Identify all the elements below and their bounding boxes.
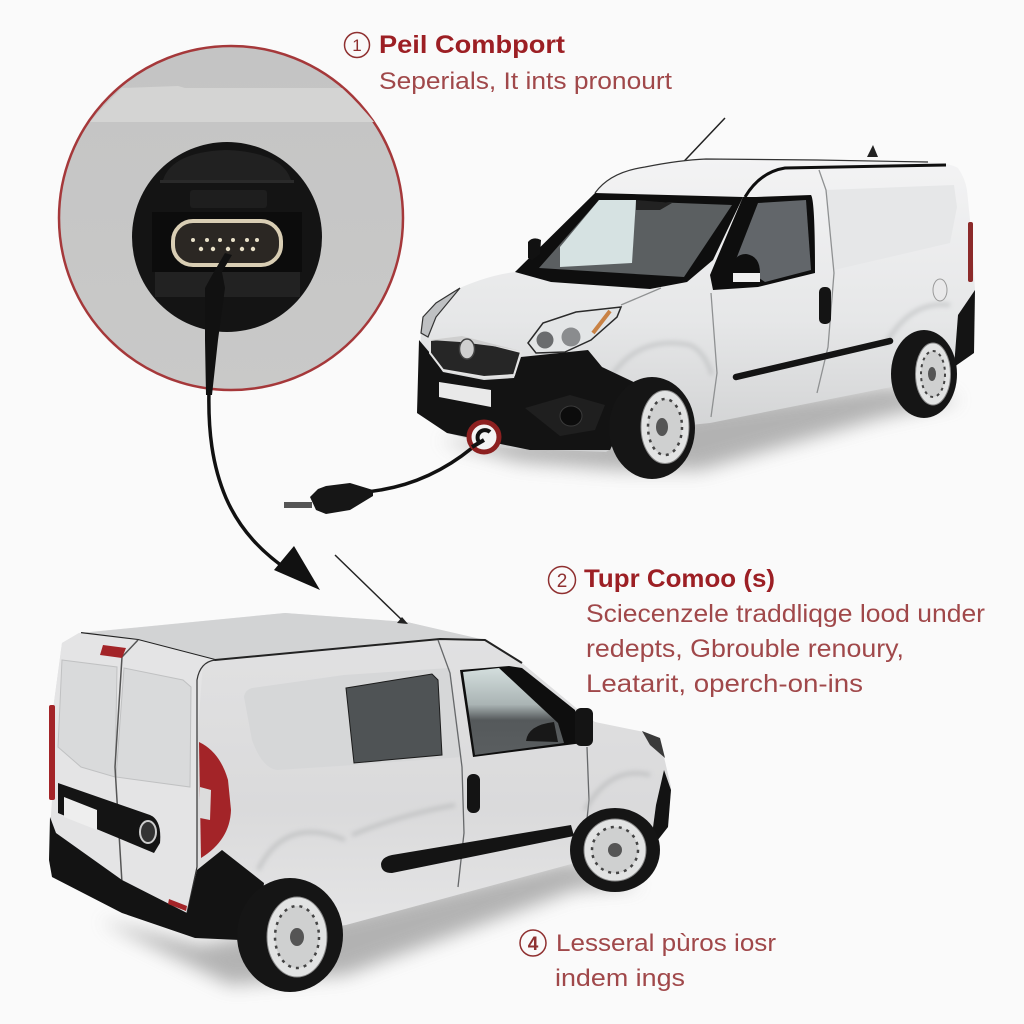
- panel highlight band: [90, 86, 374, 122]
- rear plate bar: [58, 783, 160, 853]
- callout 1 description: Seperials, It ints pronourt: [379, 68, 672, 95]
- side strip: [736, 341, 890, 377]
- fog lamp: [525, 395, 605, 436]
- callout 1 heading: 1: [352, 36, 362, 55]
- tail light: [968, 222, 973, 282]
- front arch trim: [650, 770, 671, 850]
- cab window glass: [463, 668, 564, 755]
- number plate: [64, 797, 97, 830]
- side window: [346, 674, 442, 763]
- door handle: [467, 774, 480, 813]
- door handle: [819, 287, 831, 324]
- callout 2 description: [586, 600, 985, 698]
- left headlight: [421, 288, 460, 337]
- tail light: [199, 742, 231, 858]
- callout 4 heading: 4: [528, 934, 539, 955]
- connector pins: [173, 221, 281, 265]
- ground shadow: [440, 385, 960, 470]
- load panel recess: [826, 185, 957, 270]
- van 2: rear view: [49, 555, 671, 992]
- callout 4 heading: Lesseral pùros iosr: [556, 930, 776, 957]
- side recess: [244, 668, 462, 770]
- number plate: [439, 382, 491, 407]
- badge: [140, 821, 156, 843]
- fuel flap: [933, 279, 947, 301]
- rear arch trim: [954, 290, 975, 367]
- high brake light: [100, 645, 126, 658]
- side window: [710, 195, 815, 290]
- roof line: [81, 633, 522, 663]
- cab window frame: [460, 666, 583, 757]
- front grille: [430, 337, 521, 377]
- rear bumper: [49, 817, 264, 940]
- body: [417, 159, 975, 452]
- door lines: [621, 170, 834, 417]
- port socket: [132, 142, 322, 332]
- port close-up circle: [59, 46, 403, 390]
- rear doors: [52, 633, 215, 913]
- callout 4 description: indem ings: [555, 965, 685, 992]
- roof: [81, 613, 485, 660]
- wing mirror: [575, 708, 593, 746]
- door seam: [115, 640, 138, 883]
- callout 2 heading: Tupr Comoo (s): [584, 565, 775, 593]
- antenna: [335, 555, 408, 624]
- front wheel: [609, 377, 695, 479]
- cable and arrow from port to van: [205, 253, 320, 590]
- main headlight: [528, 307, 621, 353]
- front wheel: [570, 808, 660, 892]
- fender shading: [612, 304, 950, 375]
- rear door panels: [58, 660, 191, 787]
- callout 2 heading: 2: [557, 571, 567, 592]
- roof fin: [867, 145, 878, 157]
- callout 2: text block: [548, 565, 985, 698]
- van 1: front view: [417, 118, 975, 479]
- windscreen frame: [515, 193, 743, 289]
- left tail light: [49, 705, 55, 800]
- left mirror: [528, 238, 541, 260]
- side strip: [381, 825, 574, 873]
- roof line: [745, 165, 946, 197]
- callout 4: text block: [520, 930, 776, 992]
- callout 1 heading: Peil Combport: [379, 31, 566, 59]
- rear wheel: [891, 330, 957, 418]
- callout 1: text block: [344, 31, 672, 95]
- callout 2 description: Leatarit, operch-on-ins: [586, 670, 863, 698]
- callout 2 description: redepts, Gbrouble renoury,: [586, 635, 904, 663]
- rear wheel: [237, 878, 343, 992]
- antenna: [669, 118, 725, 178]
- fender shading: [258, 773, 650, 870]
- door lines: [438, 640, 589, 887]
- ground shadow: [100, 860, 640, 985]
- windscreen glass: [539, 200, 732, 277]
- wing mirror: [732, 254, 760, 282]
- front bumper: [417, 340, 640, 450]
- callout 2 description: Sciecenzele traddliqge lood under: [586, 600, 985, 628]
- headlight edge: [642, 731, 665, 758]
- OBD plug with cable: [284, 422, 499, 514]
- body: [49, 613, 671, 940]
